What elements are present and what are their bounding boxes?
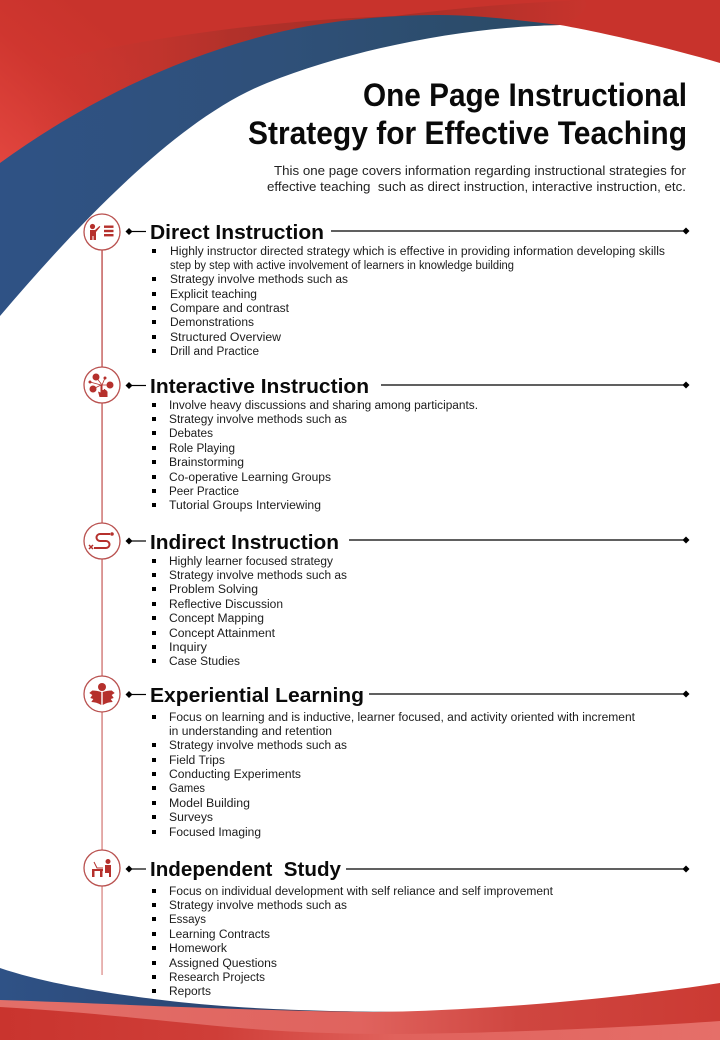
bullet list: Homework	[169, 943, 227, 955]
blue swoosh	[0, 15, 560, 316]
bullet list: Focused Imaging	[169, 827, 261, 839]
bullet list: Highly learner focused strategy	[169, 556, 333, 568]
icon: winding path	[84, 523, 120, 559]
timeline vertical line	[101, 250, 103, 975]
title: Strategy for Effective Teaching	[248, 115, 687, 151]
bullet list: Drill and Practice	[170, 346, 259, 358]
bullet list: Learning Contracts	[169, 929, 270, 941]
section: Experiential Learning	[84, 676, 690, 839]
bullet list: Reflective Discussion	[169, 599, 283, 611]
bullet list: Conducting Experiments	[169, 769, 301, 781]
title: One Page Instructional	[363, 77, 687, 113]
connector	[126, 691, 146, 698]
bullet list: Inquiry	[169, 642, 207, 654]
red swoosh top	[0, 0, 720, 200]
bullet list: Structured Overview	[170, 332, 282, 344]
icon: person at desk	[84, 850, 120, 886]
bullet list: Assigned Questions	[169, 958, 277, 970]
red swoosh shading right	[395, 0, 586, 25]
salmon band bottom	[0, 983, 720, 1040]
heading rule	[346, 866, 690, 872]
bullet list	[152, 246, 665, 358]
heading: Interactive Instruction	[150, 376, 369, 398]
section: Interactive Instruction	[84, 367, 690, 512]
bullet list: Co-operative Learning Groups	[169, 472, 331, 484]
blue swoosh bottom	[0, 968, 430, 1016]
heading: Direct Instruction	[150, 222, 324, 244]
bullet list: Strategy involve methods such as	[169, 900, 347, 912]
connector	[126, 538, 146, 544]
bullet list: Demonstrations	[170, 317, 254, 329]
lower red band	[0, 1007, 720, 1040]
heading rule	[381, 382, 690, 388]
heading rule	[349, 536, 690, 544]
section: Indirect Instruction	[84, 523, 690, 668]
bullet list: Concept Mapping	[169, 613, 264, 625]
heading rule	[331, 228, 690, 234]
bullet list: Strategy involve methods such as	[169, 740, 347, 752]
bottom banner swoosh	[0, 968, 720, 1040]
bullet list: Brainstorming	[169, 457, 244, 469]
bullet list	[152, 712, 636, 839]
bullet list	[152, 400, 478, 512]
bullet list: step by step with active involvement of learners in knowledge building	[170, 260, 514, 272]
bullet list: Reports	[169, 986, 211, 998]
bullet list	[152, 556, 347, 668]
bullet list: Essays	[169, 914, 206, 926]
bullet list: Compare and contrast	[170, 303, 290, 315]
connector	[126, 382, 146, 389]
bullet list: Strategy involve methods such as	[169, 414, 347, 426]
title	[248, 77, 687, 151]
bullet list: Explicit teaching	[170, 289, 257, 301]
red swoosh shading left	[20, 16, 400, 150]
bullet list: Strategy involve methods such as	[169, 570, 347, 582]
bullet list: Debates	[169, 428, 213, 440]
heading: Experiential Learning	[150, 685, 364, 707]
connector	[126, 228, 146, 235]
section: Independent Study	[84, 850, 690, 998]
bullet list: Research Projects	[169, 972, 265, 984]
icon: instructor at board	[84, 214, 120, 250]
bullet list: Highly instructor directed strategy which is effective in providing information developing skills	[170, 246, 665, 258]
section: Direct Instruction	[84, 214, 690, 358]
connector	[126, 866, 146, 872]
bullet list: Games	[169, 783, 205, 795]
bullet list: Surveys	[169, 812, 213, 824]
description: effective teaching such as direct instruction, interactive instruction, etc.	[267, 179, 686, 194]
heading: Indirect Instruction	[150, 532, 339, 554]
bullet list: Role Playing	[169, 443, 235, 455]
bullet list: Concept Attainment	[169, 628, 276, 640]
icon: person reading book	[84, 676, 120, 712]
icon: hand touching network	[84, 367, 120, 403]
bullet list: Focus on individual development with self reliance and self improvement	[169, 886, 554, 898]
heading: Independent Study	[150, 859, 342, 881]
bullet list	[152, 886, 554, 998]
bullet list: Strategy involve methods such as	[170, 274, 348, 286]
description: This one page covers information regarding instructional strategies for	[274, 163, 687, 178]
top banner swoosh	[0, 0, 720, 316]
heading rule	[369, 690, 690, 698]
bullet list: Field Trips	[169, 755, 225, 767]
bullet list: Case Studies	[169, 656, 240, 668]
bullet list: Tutorial Groups Interviewing	[169, 500, 321, 512]
description	[267, 163, 687, 194]
bullet list: Involve heavy discussions and sharing among participants.	[169, 400, 478, 412]
bullet list: Problem Solving	[169, 584, 258, 596]
bullet list: in understanding and retention	[169, 726, 332, 738]
bullet list: Model Building	[169, 798, 250, 810]
bullet list: Peer Practice	[169, 486, 239, 498]
bullet list: Focus on learning and is inductive, learner focused, and activity oriented with increment	[169, 712, 636, 724]
